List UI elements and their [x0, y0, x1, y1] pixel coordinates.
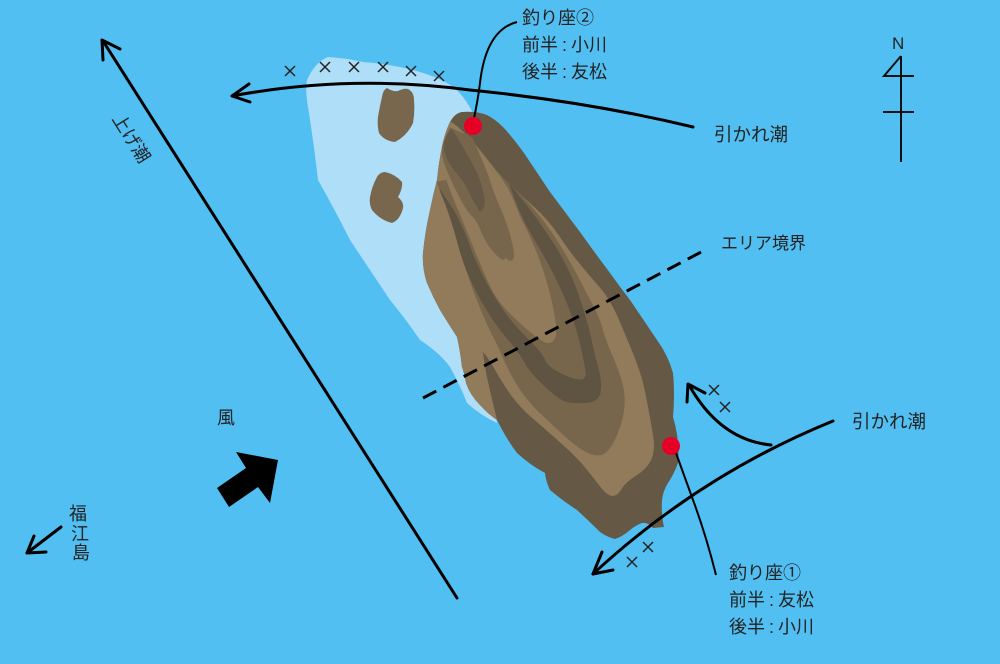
label: fishing spot 2: 後半 — [522, 62, 558, 82]
label: fishing spot 1: 釣り座① — [729, 563, 801, 583]
back eddy arrow — [687, 384, 771, 445]
fishing spot 1 marker — [662, 437, 680, 455]
label: fishing spot 2: : — [562, 35, 567, 55]
label: fishing spot 2: 前半 — [522, 35, 558, 55]
top finger mid — [442, 128, 513, 260]
top tidal current arrow: 引かれ潮 — [232, 83, 693, 127]
darkest contour band — [440, 185, 601, 403]
label: fishing spot 1: 友松 — [778, 590, 814, 610]
label: wind: 風 — [217, 408, 235, 428]
leader line: spot 2 — [473, 22, 517, 123]
label: fishing spot 1: 後半 — [729, 617, 765, 637]
top finger dark — [444, 130, 484, 211]
label: N: N — [892, 34, 904, 53]
area boundary dashed line — [423, 250, 705, 398]
label: lower 引かれ潮: 引かれ潮 — [852, 411, 926, 432]
compass lines — [883, 56, 914, 162]
label: fishing spot 2: 小川 — [571, 35, 607, 55]
tan contour — [400, 118, 653, 496]
center tan — [442, 135, 556, 343]
lower tidal current arrow: 引かれ潮 — [593, 421, 833, 574]
rock 2 — [370, 172, 403, 223]
label: fishing spot 1: : — [769, 590, 774, 610]
label: エリア境界: エリア境界 — [721, 234, 806, 253]
label: fishing spot 1: 前半 — [729, 590, 765, 610]
Fukue island direction arrow — [27, 527, 61, 553]
label: 福江島 vertical: 島 — [72, 543, 90, 563]
label: fishing spot 2: : — [562, 62, 567, 82]
label: fishing spot 1: : — [769, 617, 774, 637]
label: fishing spot 1 — [729, 563, 814, 637]
label: fishing spot 2: 釣り座② — [522, 8, 594, 28]
shallow water area — [306, 57, 497, 423]
mid contour — [437, 172, 624, 455]
label: 福江島 vertical: 福 — [69, 504, 87, 524]
outer dark band — [422, 112, 678, 539]
rock 1 — [378, 88, 414, 142]
label: fishing spot 2: 友松 — [571, 62, 607, 82]
top crosses — [285, 62, 444, 81]
north compass — [883, 34, 914, 162]
leader line: spot 1 — [676, 453, 716, 575]
fishing spot 2 marker — [464, 117, 482, 135]
island — [422, 112, 678, 539]
wind arrow — [217, 452, 278, 507]
tidal current arrow: 上げ潮 — [102, 40, 457, 598]
label: 福江島 vertical — [69, 504, 90, 563]
label: 福江島 vertical: 江 — [71, 524, 89, 544]
lower crosses — [627, 385, 730, 567]
label: fishing spot 1: 小川 — [778, 617, 814, 637]
label: top 引かれ潮: 引かれ潮 — [714, 124, 788, 145]
label: 上げ潮: 上げ潮 — [108, 110, 154, 167]
label: fishing spot 2 — [522, 8, 607, 82]
